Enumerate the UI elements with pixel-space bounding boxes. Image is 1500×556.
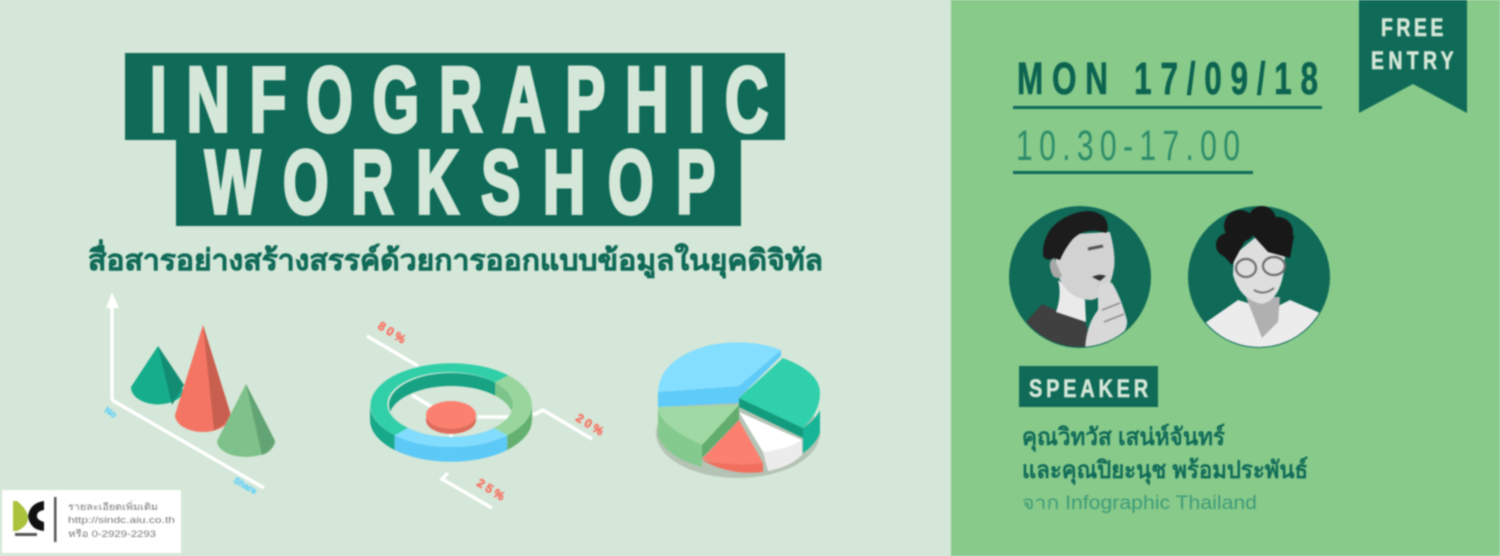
subtitle: สื่อสารอย่างสร้างสรรค์ด้วยการออกแบบข้อมูลในยุคดิจิทัล: [88, 239, 823, 278]
time: 10.30-17.00: [1016, 121, 1240, 169]
panel: right background: [951, 0, 1500, 556]
logo card text: [68, 500, 175, 540]
speaker photo 2: [1188, 206, 1330, 350]
title: INFOGRAPHIC: [150, 49, 768, 151]
logo card text: รายละเอียดเพิ่มเติม: [68, 500, 158, 513]
title: [125, 49, 785, 233]
pie: white slice: [739, 412, 802, 471]
logo card text: http://sindc.aiu.co.th: [68, 515, 175, 526]
pie: red slice: [702, 420, 763, 473]
ring: centre disc: [426, 401, 476, 434]
speaker tag: [1019, 366, 1158, 407]
date: MON 17/09/18: [1017, 55, 1318, 104]
pie: blue slice: [658, 342, 781, 407]
chart: isometric cones: [103, 292, 275, 496]
panel: left background: [0, 0, 951, 556]
logo card: [2, 490, 181, 553]
pie: green slice: [658, 405, 739, 467]
ring: outer side walls: [370, 405, 532, 462]
speaker names: และคุณปิยะนุช พร้อมประพันธ์: [1022, 456, 1308, 486]
title: WORKSHOP: [205, 132, 715, 233]
cone: green: [217, 384, 275, 457]
chart: isometric ring: 20%: [573, 411, 607, 439]
chart: isometric pie: [656, 342, 820, 478]
chart: isometric ring: [367, 319, 607, 508]
cone: red: [175, 325, 231, 432]
ribbon: free entry: ENTRY: [1371, 47, 1454, 75]
speaker names: คุณวิทวัส เสน่ห์จันทร์: [1022, 423, 1225, 453]
pie: shadow: [656, 388, 820, 478]
chart: isometric cones: Share: [232, 475, 259, 496]
chart: isometric cones: No: [103, 405, 119, 420]
pie: teal slice: [739, 358, 820, 453]
ribbon: free entry: FREE: [1381, 14, 1443, 42]
speaker photo 1: [1009, 206, 1151, 350]
chart: isometric ring: 80%: [375, 319, 409, 347]
speaker affiliation: จาก Infographic Thailand: [1022, 493, 1257, 514]
cone: teal: [131, 346, 184, 405]
ribbon: free entry: [1359, 0, 1467, 113]
ring: spokes: [412, 395, 514, 447]
speaker tag: SPEAKER: [1029, 375, 1148, 403]
speaker names: [1022, 423, 1308, 486]
chart: isometric ring: 25%: [474, 476, 508, 504]
ring: top face segments: [370, 363, 532, 447]
logo card text: หรือ 0-2929-2293: [68, 529, 156, 540]
ring: inner wall and floor: [388, 372, 514, 422]
logo mark: [13, 501, 44, 536]
